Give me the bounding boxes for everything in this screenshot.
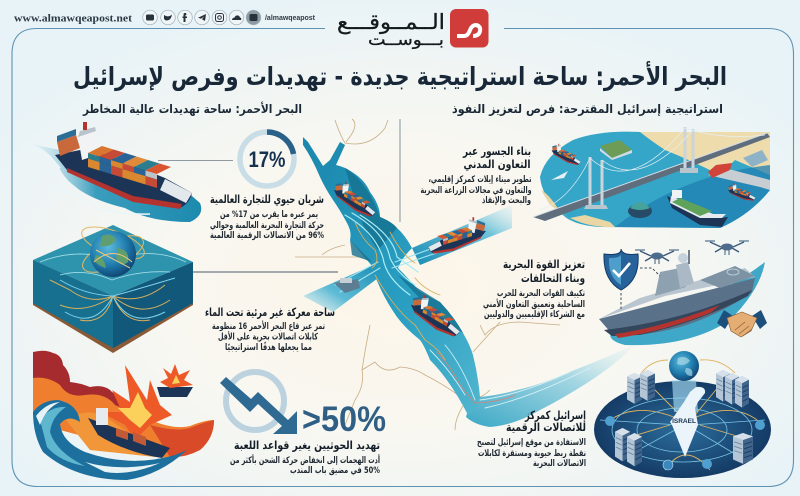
illustration: digital network map	[594, 351, 771, 478]
donut chart 17%	[240, 132, 294, 186]
panel: Houthi threat	[33, 351, 386, 480]
panel: Israel as digital hub	[477, 351, 771, 478]
social media icons	[143, 10, 261, 25]
dark sea shading	[345, 168, 463, 333]
description: الساحلية وتعميق التعاون الأمني	[483, 298, 585, 310]
description: مما يجعلها هدفًا استراتيجيًا	[225, 341, 312, 353]
logo	[337, 9, 488, 50]
illustration: warship with shield, drones and handshake	[599, 241, 767, 345]
donut chart 17%: 17%	[248, 147, 286, 172]
panel: naval power and alliances	[483, 241, 767, 345]
social handle: /almawqeapost	[265, 13, 315, 22]
illustration: port and bridge	[533, 127, 770, 228]
logo wordmark: بـــوســت	[368, 30, 444, 50]
heading: وبناء التحالفات	[521, 271, 585, 286]
description: 96% من الاتصالات الرقمية العالمية	[210, 231, 324, 241]
description	[483, 289, 585, 320]
illustration: seabed cables cube	[33, 220, 193, 353]
description	[230, 454, 380, 476]
ship: southern vessel	[406, 292, 466, 338]
heading	[503, 257, 585, 286]
trend icon: falling arrow	[220, 372, 297, 434]
heading: تهديد الحوثيين يغير قواعد اللعبة	[234, 438, 380, 453]
central map: Red Sea and shipping lanes	[295, 119, 635, 430]
description	[212, 320, 325, 353]
land borders	[295, 119, 560, 430]
heading: تعزيز القوة البحرية	[503, 257, 585, 272]
description	[477, 438, 586, 469]
description: تطوير ميناء إيلات كمركز إقليمي،	[428, 175, 532, 185]
right section heading: استراتيجية إسرائيل المقترحة: فرص لتعزيز النفوذ	[452, 102, 723, 117]
description: يمر عبره ما يقرب من 17% من	[220, 210, 318, 220]
ship: northern vessel	[330, 179, 381, 218]
illustration: digital network map: ISRAEL	[672, 418, 696, 425]
heading: إسرائيل كمركز	[524, 408, 586, 422]
description: الاتصالات البحرية	[533, 459, 586, 469]
description	[420, 175, 532, 206]
illustration: attacked ship and waves	[33, 351, 214, 480]
sea tail towards Gulf of Aden	[466, 345, 635, 427]
ship: eastern vessel	[428, 217, 486, 254]
description: تكييف القوات البحرية للحرب	[497, 289, 585, 299]
description	[210, 210, 324, 241]
heading	[506, 408, 586, 434]
heading	[462, 144, 531, 172]
left section heading: البحر الأحمر: ساحة تهديدات عالية المخاطر	[82, 101, 302, 116]
description: حركة التجارة البحرية العالمية وحوالي	[210, 221, 324, 231]
big number: >50%	[302, 400, 386, 439]
logo wordmark	[337, 10, 445, 50]
current flow lines	[335, 213, 590, 408]
heading: بناء الجسور عبر	[462, 144, 531, 159]
description: تمر عبر قاع البحر الأحمر 16 منظومة	[212, 320, 325, 332]
heading: ساحة معركة غير مرئية تحت الماء	[205, 305, 335, 319]
description: كابلات اتصالات بحرية على الأقل	[218, 330, 319, 342]
divider lines	[158, 119, 400, 272]
description: 50% في مضيق باب المندب	[290, 466, 380, 476]
description: والتعاون في مجالات الزراعة البحرية	[420, 186, 532, 196]
description: مع الشركاء الإقليميين والدوليين	[484, 310, 585, 320]
logo mark	[450, 9, 488, 48]
description: والبحث والإنقاذ	[482, 196, 531, 206]
panel: bridges through civil cooperation	[420, 127, 770, 228]
heading: التعاون المدني	[464, 157, 530, 172]
small boat	[334, 278, 360, 293]
logo wordmark: الــمــوقـــع	[337, 10, 445, 34]
description: الاستفادة من موقع إسرائيل لتصبح	[477, 438, 586, 448]
right shipping lane	[412, 205, 512, 265]
heading: للاتصالات الرقمية	[506, 420, 586, 434]
description: نقطة ربط حيوية ومستقرة لكابلات	[478, 449, 586, 459]
left shipping lane	[303, 263, 378, 312]
illustration: container ship	[26, 122, 201, 222]
description: أدت الهجمات إلى انخفاض حركة الشحن بأكثر من	[230, 454, 380, 466]
panel: invisible underwater battlefield	[33, 220, 335, 353]
sea body	[303, 137, 480, 415]
website address: www.almawqeapost.net	[14, 12, 132, 24]
panel: world trade artery	[26, 122, 324, 241]
heading: شريان حيوي للتجارة العالمية	[210, 192, 324, 207]
